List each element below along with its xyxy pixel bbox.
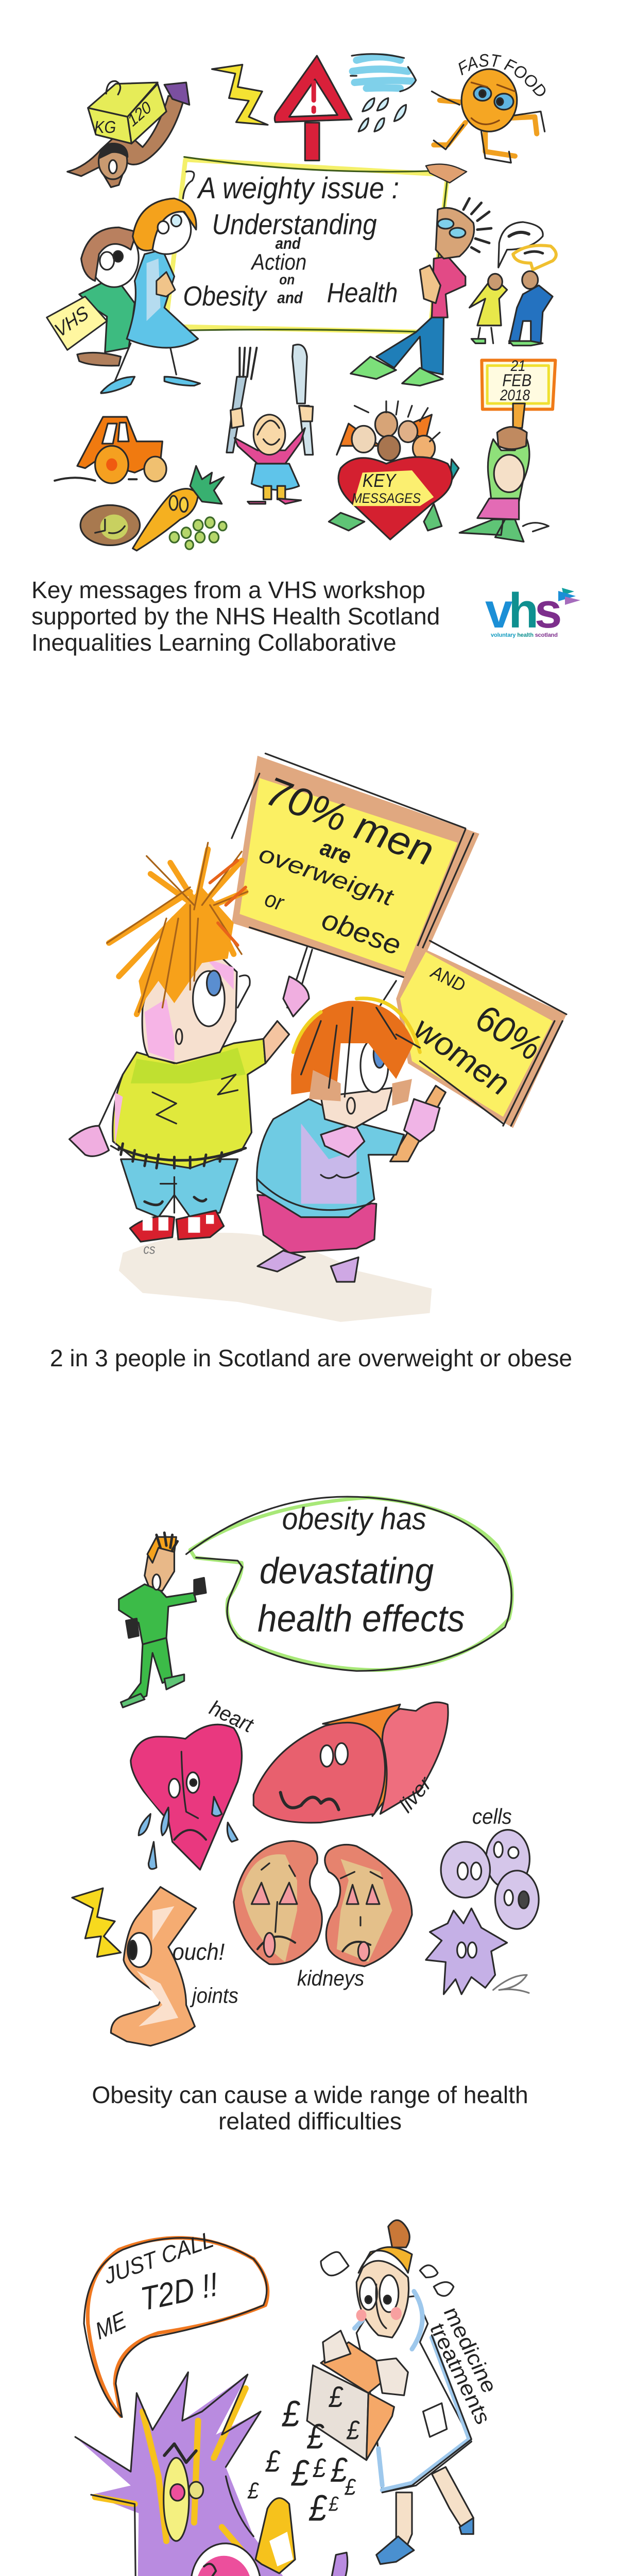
icon: man under 120kg weight — [67, 81, 190, 187]
icon: falling pound signs: £ — [282, 2393, 301, 2435]
illustration: organs with health effects — [72, 1497, 539, 2046]
placard: 70% men: 70% men — [261, 768, 439, 875]
callout: just call me T2D: JUST CALL — [101, 2226, 216, 2290]
icon: group with key messages heart: MESSAGES — [352, 491, 421, 506]
illustration: title scene — [46, 53, 558, 551]
icon: liver — [253, 1702, 448, 1823]
panel: workshop title — [31, 53, 580, 656]
icon: falling pound signs — [247, 2393, 356, 2529]
banner: A weighty issue: and — [276, 234, 301, 252]
placard: 70% men: or — [262, 885, 287, 917]
icon: falling pound signs: £ — [329, 2493, 339, 2515]
text: workshop description: Inequalities Learning Collaborative — [31, 629, 397, 656]
icon: peas — [169, 517, 227, 549]
placard: and 60% women: women — [408, 1009, 515, 1104]
logo: voluntary health scotland: vhs — [485, 583, 560, 638]
icon: liver: liver — [395, 1771, 436, 1817]
icon: heart: heart — [206, 1696, 257, 1738]
icon: painful leg joint: joints — [190, 1984, 238, 2008]
callout: just call me T2D: ME — [92, 2307, 130, 2345]
callout: obesity has devastating health effects: obesity has — [282, 1502, 426, 1536]
figure: doctor carrying box: medicine — [440, 2301, 501, 2398]
icon: cells: cells — [472, 1805, 512, 1828]
icon: date placard 21 FEB 2018 — [482, 358, 555, 428]
banner: A weighty issue: and — [277, 289, 303, 307]
icon: date placard 21 FEB 2018: 2018 — [500, 387, 530, 403]
icon: falling pound signs: £ — [308, 2487, 328, 2529]
icon: tractor — [55, 417, 166, 483]
icon: falling pound signs: £ — [265, 2444, 281, 2478]
icon: falling pound signs: £ — [313, 2453, 326, 2483]
figure: woman with red hair — [257, 998, 440, 1282]
callout: obesity has devastating health effects: health effects — [258, 1597, 465, 1639]
placard: 70% men: obese — [318, 904, 404, 962]
icon: cells — [426, 1805, 539, 1994]
icon: group with key messages heart: KEY — [363, 470, 397, 491]
panel: health effects — [72, 1497, 539, 2134]
text: caption: Obesity can cause a wide range of health — [92, 2081, 528, 2108]
icon: fast food character — [431, 54, 546, 164]
banner: A weighty issue: Understanding — [212, 209, 377, 241]
illustration: T2D monster and NHS spend — [75, 2220, 511, 2576]
figure: man holding banner — [351, 198, 491, 386]
icon: carrot — [133, 466, 224, 551]
placard: and 60% women: AND — [427, 961, 468, 996]
placard: 70% men: overweight — [256, 840, 397, 912]
figure: two women holding banner — [47, 198, 200, 393]
icon: falling pound signs: £ — [306, 2417, 324, 2456]
callout: just call me T2D — [84, 2226, 268, 2417]
icon: date placard 21 FEB 2018: FEB — [502, 371, 531, 390]
icon: warning sign — [274, 56, 352, 161]
icon: lightning bolt — [212, 64, 268, 125]
shadow on the floor — [119, 1233, 432, 1322]
text: caption: related difficulties — [218, 2108, 402, 2134]
figure: doctor carrying box: £ — [329, 2381, 344, 2414]
logo: voluntary health scotland: voluntary health scotland — [491, 632, 558, 638]
icon: man under 120kg weight: 120 — [124, 97, 155, 130]
icon: painful leg joint — [72, 1887, 238, 2046]
icon: falling pound signs: £ — [290, 2452, 310, 2494]
placard: and 60% women: 60% — [470, 995, 547, 1070]
figure: two women holding banner: VHS — [51, 301, 92, 342]
icon: man under 120kg weight: KG — [94, 117, 116, 137]
icon: date placard 21 FEB 2018: 21 — [510, 358, 526, 374]
banner: A weighty issue: Health — [327, 277, 398, 308]
banner: A weighty issue: Action — [250, 249, 306, 275]
placard: 70% men: are — [317, 834, 354, 870]
banner: A weighty issue: A weighty issue : — [197, 171, 399, 205]
figure: doctor carrying box: treatments — [426, 2318, 494, 2429]
icon: potato — [80, 505, 140, 545]
figure: T2D monster — [75, 2372, 353, 2576]
callout: just call me T2D: T2D !! — [138, 2265, 220, 2318]
callout: obesity has devastating health effects: devastating — [260, 1550, 434, 1591]
icon: falling pound signs: £ — [330, 2451, 348, 2489]
placard: and 60% women — [380, 941, 566, 1161]
icon: falling pound signs: £ — [247, 2478, 260, 2503]
icon: falling pound signs: £ — [344, 2473, 356, 2500]
figure: child holding placard — [459, 427, 548, 541]
figure: doctor carrying box: £ — [346, 2415, 360, 2445]
text: workshop description: supported by the NHS Health Scotland — [31, 603, 440, 630]
figure: two people talking — [470, 222, 556, 346]
text: caption: 2 in 3 people in Scotland are overweight or obese — [50, 1345, 572, 1371]
callout: obesity has devastating health effects — [186, 1497, 512, 1671]
panel: cost of type 2 diabetes — [73, 2220, 550, 2576]
icon: heart — [131, 1696, 257, 1870]
banner: A weighty issue: on — [279, 272, 295, 287]
icon: painful leg joint: ouch! — [173, 1940, 225, 1965]
illustration: two people with placards — [70, 754, 566, 1322]
icon: kidneys — [234, 1841, 412, 1990]
placard: 70% men — [232, 754, 479, 1008]
figure: man with orange hair: cs — [143, 1242, 156, 1257]
icon: rain cloud — [351, 54, 416, 131]
figure: man in green — [119, 1533, 206, 1707]
banner: A weighty issue — [166, 157, 467, 332]
figure: man with orange hair — [70, 843, 309, 1257]
banner: A weighty issue: Obesity — [183, 280, 267, 311]
figure: doctor carrying box — [307, 2220, 501, 2564]
icon: fast food character: FAST FOOD — [458, 54, 546, 96]
figure: person with fork and knife — [227, 345, 313, 504]
icon: group with key messages heart — [329, 401, 459, 539]
text: workshop description: Key messages from a VHS workshop — [31, 577, 425, 603]
icon: kidneys: kidneys — [297, 1967, 364, 1990]
panel: prevalence of overweight — [50, 754, 572, 1371]
